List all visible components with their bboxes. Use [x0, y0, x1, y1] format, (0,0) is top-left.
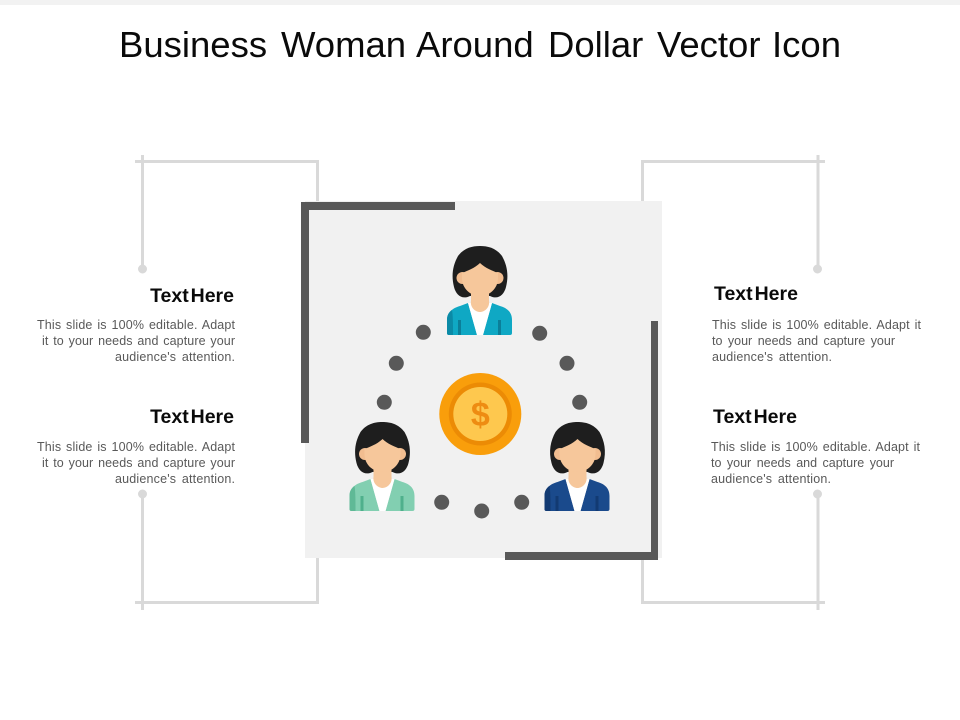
- text block: bottom left: it to your needs and capture your: [42, 456, 235, 470]
- title: Business: [119, 24, 267, 65]
- connector: top right: [642, 155, 825, 272]
- connector: bottom left: [135, 491, 318, 610]
- icon: dollar coin: $: [471, 396, 490, 434]
- text block: top left: it to your needs and capture your: [42, 334, 235, 348]
- text block: top right: audience's attention.: [712, 350, 832, 364]
- text block: bottom left: This slide is 100% editable. Adapt: [37, 440, 236, 454]
- title: Woman: [281, 24, 406, 65]
- connector: bottom right: [642, 491, 825, 610]
- frame corner: top left: [301, 202, 455, 443]
- dotted ring: [377, 325, 587, 518]
- text block: top right: This slide is 100% editable. Adapt it: [712, 318, 922, 332]
- text block: top right: [712, 283, 922, 364]
- text block: top right: Text Here: [714, 283, 798, 305]
- text block: top left: audience's attention.: [115, 350, 235, 364]
- icon: woman top, teal jacket: [447, 246, 512, 335]
- title: Vector: [657, 24, 760, 65]
- text block: bottom right: Text Here: [713, 406, 797, 428]
- text block: top right: to your needs and capture your: [712, 334, 895, 348]
- icon: woman left, mint jacket: [350, 422, 414, 511]
- text block: bottom left: [37, 406, 236, 486]
- connector: top left: [135, 155, 318, 272]
- title: Dollar: [548, 24, 643, 65]
- text block: bottom left: Text Here: [150, 406, 234, 428]
- text block: top left: [37, 285, 236, 364]
- icon: dollar coin: [439, 373, 521, 455]
- title: Around: [416, 24, 534, 65]
- text block: bottom right: [711, 406, 921, 486]
- text block: bottom left: audience's attention.: [115, 472, 235, 486]
- text block: bottom right: audience's attention.: [711, 472, 831, 486]
- text block: top left: This slide is 100% editable. Adapt: [37, 318, 236, 332]
- text block: bottom right: to your needs and capture your: [711, 456, 894, 470]
- panel: central square: [301, 201, 662, 558]
- icon: woman right, navy jacket: [544, 422, 610, 511]
- text block: top left: Text Here: [150, 285, 234, 307]
- frame corner: bottom right: [505, 321, 658, 560]
- text block: bottom right: This slide is 100% editable. Adapt it: [711, 440, 921, 454]
- title: Icon: [772, 24, 841, 65]
